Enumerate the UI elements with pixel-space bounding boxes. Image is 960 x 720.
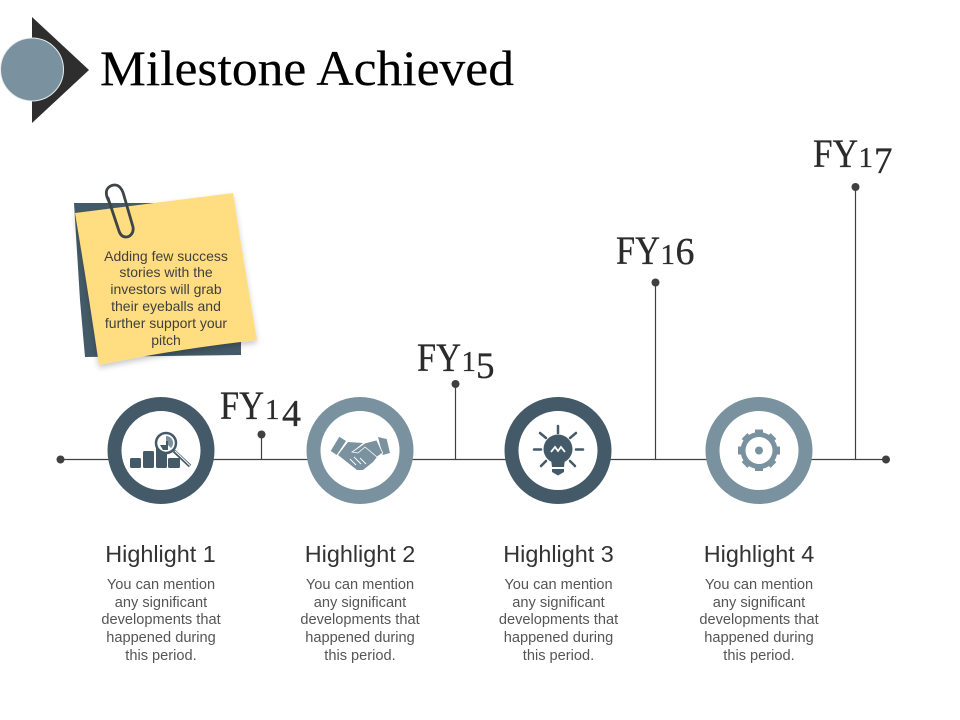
header icon: arrow with circle xyxy=(0,17,89,123)
milestone FY15 xyxy=(417,335,494,459)
highlight 3 ring with bulb icon xyxy=(512,404,604,497)
sticky text: their eyeballs and xyxy=(111,298,221,314)
highlight 3 text: any significant xyxy=(512,595,605,611)
icon: handshake xyxy=(331,437,390,470)
milestone FY16: 1 xyxy=(660,239,675,271)
sticky text: pitch xyxy=(151,332,181,348)
highlight 1 text: happened during xyxy=(106,630,216,646)
highlight 1 text xyxy=(101,541,221,664)
sticky text: investors will grab xyxy=(110,281,222,297)
highlight 4 text: You can mention xyxy=(705,577,813,593)
highlight 2 ring with handshake icon xyxy=(314,404,406,497)
icon: light bulb xyxy=(534,426,583,476)
highlight 1 text: any significant xyxy=(115,595,207,611)
highlight 3 text: happened during xyxy=(504,630,613,646)
highlight 4 text: happened during xyxy=(704,630,814,646)
yellow sheet xyxy=(75,193,257,365)
milestone FY14: 1 xyxy=(265,394,280,426)
highlight 1 text: this period. xyxy=(125,648,197,664)
highlight 2 text: happened during xyxy=(305,630,415,646)
highlight 1 text: developments that xyxy=(101,612,221,628)
highlight 2 text: Highlight 2 xyxy=(305,541,415,567)
highlight 3 text xyxy=(499,541,618,664)
highlight 2 text xyxy=(300,541,420,664)
sticky text: Adding few success xyxy=(104,248,228,264)
back sheet xyxy=(74,203,241,357)
highlight 3 text: Highlight 3 xyxy=(503,541,614,567)
milestone FY16: 6 xyxy=(676,231,694,273)
timeline axis xyxy=(56,456,890,464)
icon: gear xyxy=(738,430,780,471)
milestone FY17 xyxy=(813,131,892,459)
highlight 4 text: Highlight 4 xyxy=(704,541,814,567)
milestone FY14: FY xyxy=(220,383,264,428)
milestone FY15: 1 xyxy=(462,346,476,378)
highlight 2 text: this period. xyxy=(324,648,396,664)
milestone FY17: 7 xyxy=(874,141,892,182)
highlight 4 text xyxy=(699,541,819,664)
icon: bars and magnifier xyxy=(130,433,190,468)
highlight 2 text: any significant xyxy=(314,595,406,611)
sticky text: further support your xyxy=(105,315,227,331)
highlight 3 text: this period. xyxy=(523,648,594,664)
highlight 2 text: developments that xyxy=(300,612,420,628)
highlight 3 text: developments that xyxy=(499,612,618,628)
highlight 3 text: You can mention xyxy=(504,577,613,593)
highlight 2 text: You can mention xyxy=(306,577,414,593)
highlight 1 ring with chart icon xyxy=(114,404,208,497)
highlight 1 text: You can mention xyxy=(107,577,215,593)
milestone FY14: 4 xyxy=(282,393,301,435)
highlight 4 ring with gear icon xyxy=(712,404,806,497)
highlight 4 text: this period. xyxy=(723,648,795,664)
milestone FY15: FY xyxy=(417,335,461,380)
milestone FY14 xyxy=(220,383,301,459)
highlight 1 text: Highlight 1 xyxy=(105,541,216,567)
milestone FY17: 1 xyxy=(858,142,873,174)
paperclip xyxy=(106,185,133,237)
milestone FY16: FY xyxy=(616,228,660,273)
milestone FY17: FY xyxy=(813,131,858,176)
title: Milestone Achieved xyxy=(100,40,514,96)
highlight 4 text: any significant xyxy=(713,595,805,611)
milestone FY15: 5 xyxy=(476,346,494,387)
sticky note xyxy=(74,185,257,365)
sticky text: stories with the xyxy=(119,264,213,280)
highlight 4 text: developments that xyxy=(699,612,819,628)
milestone FY16 xyxy=(616,228,694,459)
